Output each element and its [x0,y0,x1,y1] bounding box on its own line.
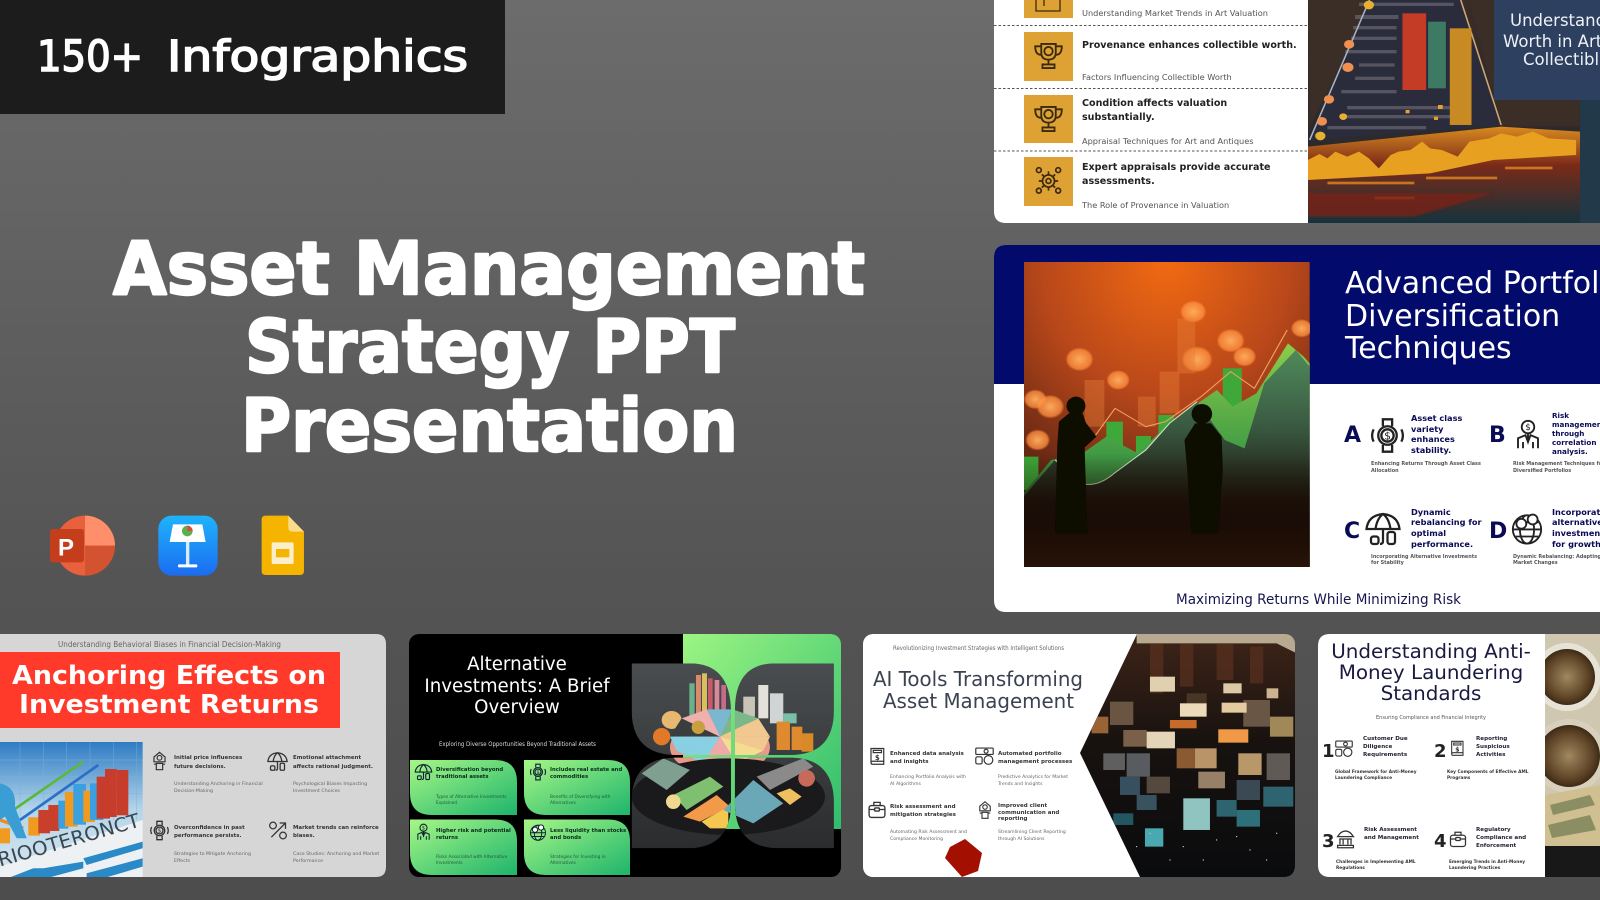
item: client communication: Streamlining Client Reporting [998,829,1066,835]
item: overconfidence: Effects [174,858,191,864]
photo: pie chart in four leaf shapes [632,663,834,848]
item: client communication: reporting [998,816,1028,822]
tile: less liquidity: Alternatives [550,860,577,866]
tile: higher risk: returns [436,835,458,841]
item 2: Activities [1476,752,1506,758]
item: market trends: biases. [293,833,315,839]
slide title: Investments: A Brief [424,676,610,697]
row 1: market trends [1024,0,1268,18]
item: emotional attachment: Psychological Biases Impacting [293,781,367,787]
photo: washing machines and cash [1532,634,1600,846]
item 2: Programs [1447,775,1471,781]
item: data analysis: Enhancing Portfolio Analysis with [890,774,966,780]
row 3: condition: substantially. [1082,112,1155,123]
dark teal strip [1580,100,1600,223]
banner: 150+ Infographics [0,0,505,114]
tile: real estate: Includes real estate and [550,767,622,773]
item: client communication: through AI Solutions [998,836,1045,842]
tile: higher risk: Risks Associated with Alternative [436,854,508,860]
row 4: appraisals: assessments. [1082,176,1155,187]
item A: Allocation [1371,468,1399,474]
item: client communication: Improved client [998,803,1047,809]
item 4: Regulatory [1476,827,1511,833]
item 2: Reporting [1476,736,1507,742]
item: portfolio automation: Predictive Analytics for Market [998,774,1068,780]
item 1: Global Framework for Anti-Money [1335,769,1417,775]
tile: less liquidity: Strategies for Investing in [550,854,606,860]
item C: Incorporating Alternative Investments [1371,554,1477,560]
tile: real estate [524,760,630,815]
item B [1489,411,1600,474]
icon: PowerPoint: P [58,534,74,561]
item B: through [1552,429,1584,438]
item: risk assessment: Compliance Monitoring [890,836,943,842]
slide subtitle: Understanding Behavioral Biases in Financial Decision-Making [58,640,281,649]
tile: real estate: Benefits of Diversifying with [550,794,611,800]
tile: higher risk: Higher risk and potential [436,828,511,834]
item C: optimal [1411,528,1446,538]
item: risk assessment [869,802,967,842]
item D [1489,507,1600,566]
item 3 [1322,827,1419,871]
photo: 3D bar chart [0,742,143,877]
row 3: condition [1024,95,1254,146]
tile: higher risk [410,820,517,875]
item: emotional attachment: Emotional attachment [293,755,361,761]
slide title: Alternative [467,654,567,675]
item C: Dynamic [1411,507,1451,517]
item A: Asset class [1411,413,1462,423]
item: risk assessment: mitigation strategies [890,812,957,818]
tile: real estate: commodities [550,774,588,780]
item: overconfidence: Strategies to Mitigate Anchoring [174,851,251,857]
item: data analysis: AI Algorithms [890,781,921,787]
slide title: AI Tools Transforming [873,667,1083,691]
item C: performance. [1411,539,1473,549]
row 4: appraisals [1024,157,1271,210]
item: overconfidence: performance persists. [174,833,242,839]
item: overconfidence: Overconfidence in past [174,825,245,831]
item C: for Stability [1371,560,1405,566]
slide title: Techniques [1344,331,1512,366]
item: data analysis: Enhanced data analysis [890,751,965,757]
row 1: market trends: Understanding Market Trends in Art Valuation [1082,8,1268,18]
item: portfolio automation: management processes [998,759,1073,765]
tile: less liquidity [524,820,630,875]
item: initial price: future decisions. [174,764,226,770]
item 4: Laundering Practices [1449,865,1501,871]
slide subtitle: Exploring Diverse Opportunities Beyond Traditional Assets [439,742,596,748]
item: client communication [980,802,1066,842]
item: market trends: Market trends can reinforce [293,825,379,831]
item: market trends: Performance [293,858,323,864]
item: market trends: Case Studies: Anchoring and Market [293,851,379,857]
item B: analysis. [1552,447,1588,456]
tile: less liquidity: Less liquidity than stocks [550,828,626,834]
item D: Market Changes [1513,560,1558,566]
item: client communication: communication and [998,810,1059,816]
item: emotional attachment: Investment Choices [293,788,341,794]
panel: alternative investments slide [409,634,841,877]
item 1: Requirements [1363,752,1408,758]
item 3: Risk Assessment [1364,827,1417,833]
item 1 [1322,736,1417,781]
item 1: Diligence [1363,744,1392,750]
icon: Keynote [158,516,218,576]
item: emotional attachment: affects rational judgment. [293,764,373,770]
item 1: 1 [1322,741,1335,762]
item 2: Suspicious [1476,744,1510,750]
panel: anchoring effects slide [0,634,386,877]
title box: Anchoring Effects on [12,661,326,691]
item: overconfidence [151,821,251,864]
item C [1344,507,1483,566]
item: portfolio automation: Trends and Insights [997,781,1043,787]
item 4: Enforcement [1476,843,1517,849]
tile: less liquidity: and bonds [550,835,581,841]
item: risk assessment: Risk assessment and [890,804,956,810]
panel: top slide, art valuation [994,0,1600,223]
item: initial price [154,752,263,794]
item 2: Key Components of Effective AML [1447,769,1529,775]
item A: variety [1411,424,1444,434]
app icons row [50,516,304,576]
item C: C [1344,519,1360,544]
item: initial price: Decision-Making [174,788,213,794]
item B: B [1489,423,1506,448]
photo: data cubes [1077,634,1297,877]
icon: Google Slides [262,516,304,575]
row 2: provenance: Factors Influencing Collectible Worth [1082,72,1232,82]
item B: Diversified Portfolios [1513,468,1571,474]
tile: diversification: traditional assets [436,774,488,780]
row 3: condition: Appraisal Techniques for Art and Antiques [1082,136,1254,146]
main title: Asset Management [113,227,865,312]
slide title: Money Laundering [1339,661,1523,684]
banner: 150+ Infographics: Infographics [167,32,468,82]
item: portfolio automation [976,748,1073,787]
slide title: Understanding Anti- [1331,640,1531,663]
tile: diversification [410,760,517,815]
item: emotional attachment [268,753,373,794]
row 4: appraisals: The Role of Provenance in Valuation [1081,200,1229,210]
item: data analysis [871,748,966,787]
item: initial price: Initial price influences [174,755,242,761]
photo: investors and glowing chart [1023,262,1313,567]
item: market trends [270,822,379,864]
item B: Risk [1552,411,1569,420]
item D: D [1489,519,1507,544]
photo: pyramid chart over city [1308,0,1580,223]
item 2: 2 [1434,741,1447,762]
item C: rebalancing for [1411,517,1483,527]
icon: PowerPoint [50,516,115,576]
title box [0,652,340,728]
slide subtitle: Revolutionizing Investment Strategies with Intelligent Solutions [893,645,1064,652]
tile: diversification: Explained [436,800,457,806]
main title: Strategy PPT [245,305,735,390]
item: risk assessment: Automating Risk Assessment and [890,829,967,835]
item B: correlation [1552,438,1596,447]
slide title: Asset Management [883,689,1074,713]
row 2: provenance [1024,32,1297,82]
title box: Investment Returns [19,690,319,720]
item A [1344,413,1481,474]
main title [113,227,865,469]
item 2 [1434,736,1529,781]
title label [1494,0,1600,100]
tile: diversification: Diversification beyond [436,767,503,773]
item 4 [1434,827,1526,871]
item: initial price: Understanding Anchoring in Financial [174,781,263,787]
item 4: 4 [1434,831,1447,852]
item A: stability. [1411,445,1451,455]
item A: Enhancing Returns Through Asset Class [1371,461,1481,467]
red hexagon [945,839,982,877]
item 4: Emerging Trends in Anti-Money [1449,859,1525,865]
item 1: Customer Due [1363,736,1408,742]
slide footer: Maximizing Returns While Minimizing Risk [1176,592,1462,608]
tile: diversification: Types of Alternative Investments [435,794,507,800]
slide title: Diversification [1345,299,1560,334]
main title: Presentation [241,384,738,469]
slide title: Overview [474,697,560,718]
item A: enhances [1411,434,1455,444]
item 1: Laundering Compliance [1335,775,1392,781]
black strip under photo [1545,846,1600,877]
banner: 150+ Infographics: 150+ [37,32,143,82]
panel: advanced portfolio diversification slide [994,245,1600,612]
tile: real estate: Alternatives [550,800,577,806]
item 3: 3 [1322,831,1335,852]
slide title: Standards [1381,682,1481,705]
item: data analysis: and insights [890,759,929,765]
item: portfolio automation: Automated portfolio [998,751,1062,757]
tile: higher risk: Investments [436,860,463,866]
slide subtitle: Ensuring Compliance and Financial Integrity [1376,715,1486,721]
row 2: provenance: Provenance enhances collectible worth. [1082,40,1297,51]
panel: AI tools slide [863,634,1297,877]
item A: A [1344,423,1361,448]
row 4: appraisals: Expert appraisals provide accurate [1082,162,1271,173]
panel: anti-money laundering slide [1318,634,1600,877]
item 4: Compliance and [1476,835,1526,841]
item 3: Challenges in Implementing AML [1336,859,1416,865]
item 3: and Management [1364,835,1419,841]
item 3: Regulations [1336,865,1365,871]
row 3: condition: Condition affects valuation [1082,98,1227,109]
